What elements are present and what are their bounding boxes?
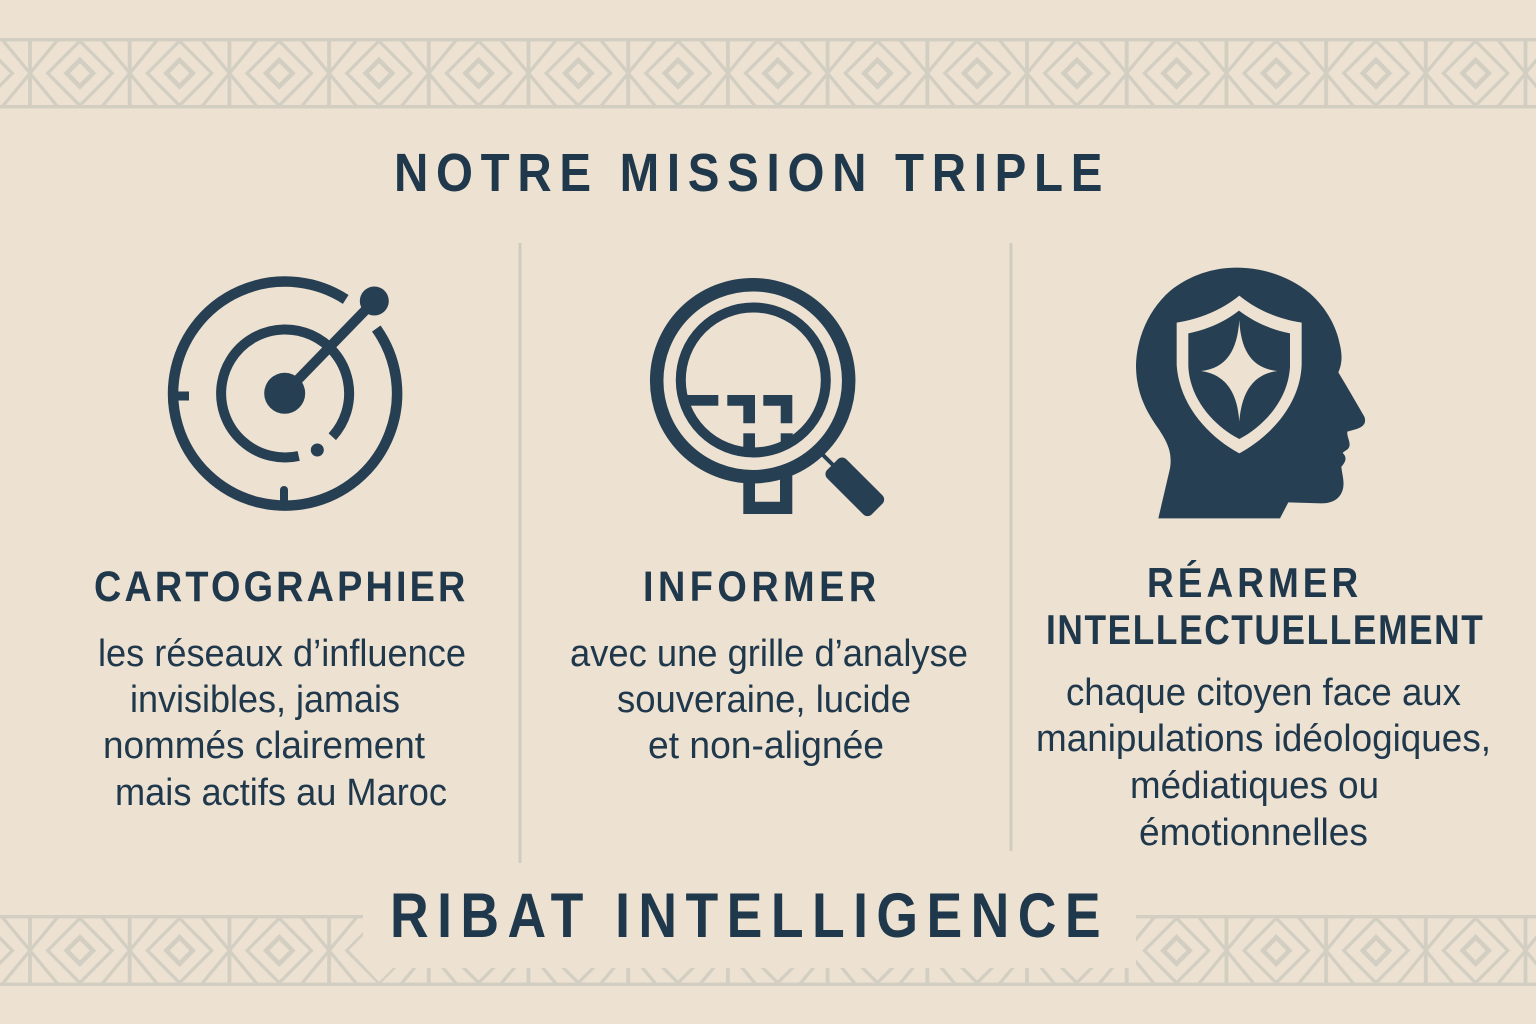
text: cartographier description: les réseaux d’influence xyxy=(98,633,466,675)
text: informer description: souveraine, lucide xyxy=(617,679,911,721)
text: informer description xyxy=(570,633,968,767)
text: rearmer description: chaque citoyen face aux xyxy=(1066,672,1461,714)
panel: informer xyxy=(570,285,968,767)
icon: head with shield xyxy=(1136,268,1365,518)
column dividers xyxy=(518,243,1012,863)
text: rearmer description xyxy=(1036,672,1491,854)
text: cartographier description: mais actifs au Maroc xyxy=(115,772,447,814)
bottom decorative band xyxy=(0,905,1536,986)
panel: rearmer xyxy=(1036,268,1491,854)
heading: informer: INFORMER xyxy=(643,562,876,611)
text: rearmer description: manipulations idéologiques, xyxy=(1036,718,1491,760)
text: rearmer description: médiatiques ou xyxy=(1130,765,1379,807)
panel: cartographier xyxy=(94,282,466,814)
footer brand name: RIBAT INTELLIGENCE xyxy=(390,881,1101,951)
top decorative band xyxy=(0,38,1536,108)
heading: rearmer intellectuellement xyxy=(1046,560,1483,654)
heading: cartographier: CARTOGRAPHIER xyxy=(94,562,465,611)
icon: radar xyxy=(173,282,397,506)
text: rearmer description: émotionnelles xyxy=(1139,812,1368,854)
text: informer description: et non-alignée xyxy=(648,725,884,767)
text: cartographier description: nommés clairement xyxy=(103,725,425,767)
heading: rearmer intellectuellement: INTELLECTUELLEMENT xyxy=(1046,607,1483,654)
title: NOTRE MISSION TRIPLE xyxy=(394,142,1102,203)
heading: rearmer intellectuellement: RÉARMER xyxy=(1147,560,1358,607)
icon: magnifying glass xyxy=(657,285,887,519)
text: cartographier description xyxy=(98,633,466,814)
text: informer description: avec une grille d’analyse xyxy=(570,633,968,675)
text: cartographier description: invisibles, jamais xyxy=(130,679,400,721)
